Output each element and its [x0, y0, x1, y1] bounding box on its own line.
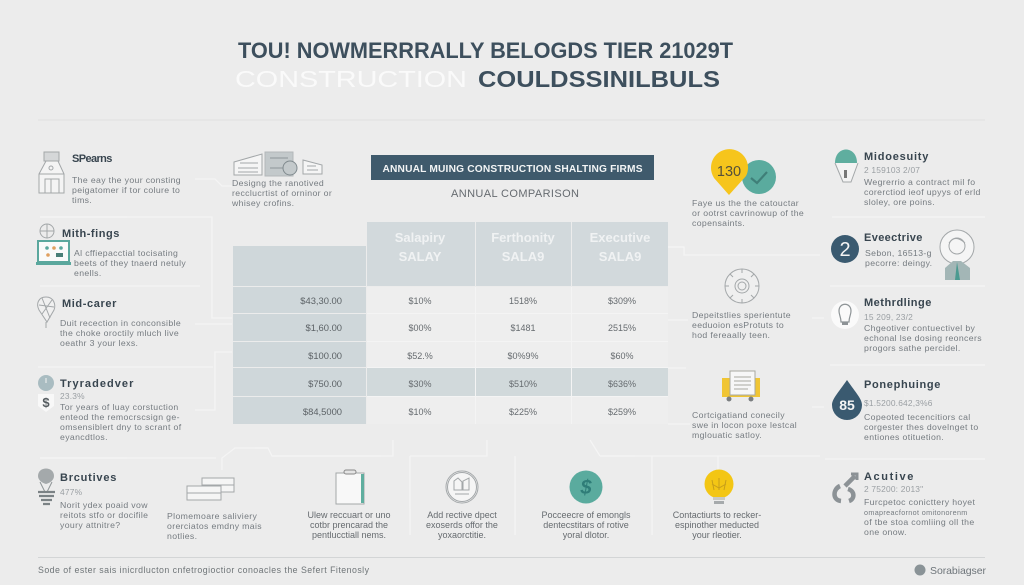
table header: SALAY [399, 249, 442, 264]
table values: 1518% [509, 296, 537, 306]
panel: Midoesuity: sloley, ore poins. [864, 197, 935, 207]
icon: clock check: 130 [717, 164, 741, 180]
panel: Methrdlinge: Chgeotiver contuectivel by [864, 323, 976, 333]
panel: stacked boxes note: orerciatos emdny mais [167, 521, 262, 531]
table header: Salapiry [395, 230, 446, 245]
table values: $636% [608, 379, 636, 389]
panel: dollar circle note: yoral dlotor. [563, 530, 609, 540]
panel: clipboard note: Ulew reccuart or uno [307, 510, 391, 520]
panel: Bricutives: reitots stfo or docifile [60, 510, 148, 520]
panel: Mith-fings: beets of they tnaerd netuly [74, 258, 186, 268]
icon: building jar [39, 152, 64, 193]
panel: home circle note [426, 471, 498, 540]
panel: stacked boxes note [167, 478, 262, 541]
table header: SALA9 [599, 249, 641, 264]
panel: Mid-carer: Mid-carer [62, 298, 117, 310]
panel: dollar circle note: dentecstitars of rotive [543, 520, 629, 530]
panel: 130 callout [692, 149, 804, 228]
icon: houses in circle [446, 471, 478, 503]
table values: 2515% [608, 323, 636, 333]
panel: Mith-fings: enells. [74, 268, 102, 278]
table header [395, 230, 650, 264]
panel: 130 callout: or ootrst cavrinowup of the [692, 208, 804, 218]
panel: lightbulb note: your rleotier. [692, 530, 742, 540]
icon: clipboard [336, 470, 364, 504]
panel: gear note: hod fereaally teen. [692, 330, 770, 340]
panel: Ponephuinge: $1.5200.642,3%6 [864, 398, 933, 408]
table values: $309% [608, 296, 636, 306]
icon: globe and laptop [36, 224, 71, 265]
panel: stacked boxes note: Plomemoare saliviery [167, 511, 258, 521]
panel: Methrdlinge: 15 209, 23/2 [864, 312, 913, 322]
footer note: Sode of ester sais inicrdlucton cnfetrogioctior conoacles the Sefert Fitenosly [38, 565, 370, 575]
table values: $259% [608, 407, 636, 417]
table values: $84,5000 [303, 406, 342, 417]
panel: Acutive: 2 75200: 2013" [864, 484, 923, 494]
icon: teal dollar coin: $ [579, 477, 592, 499]
table values: $60% [610, 351, 634, 361]
table values: $10% [408, 407, 432, 417]
salary comparison table [233, 222, 668, 424]
table header: Executive [590, 230, 650, 245]
panel: Mith-fings [36, 224, 186, 278]
icon: bulb badge [831, 301, 859, 329]
footer logo: Sorabiagser [930, 565, 986, 577]
title [235, 38, 734, 92]
panel: Bricutives: Norit ydex poaid vow [60, 500, 148, 510]
panel: Ponephuinge [832, 379, 979, 442]
panel: Mid-carer: the choke oroctily mluch live [60, 328, 179, 338]
panel: Tryradedver: enteod the remocrscsign ge- [60, 412, 180, 422]
panel: Spearns: The eay the your consting [72, 175, 181, 185]
panel: gear note: eeduoion esProtuts to [692, 320, 784, 330]
panel: 130 callout: copensaints. [692, 218, 745, 228]
panel: Methrdlinge [831, 297, 982, 353]
panel: building note: whisey crofins. [231, 198, 294, 208]
title: TOU! NOWMERRRALLY BELOGDS TIER 21029T [238, 38, 734, 63]
panel: Mid-carer [38, 297, 181, 348]
icon: stacked boxes [187, 478, 234, 500]
panel: Spearns [39, 152, 181, 205]
table values: $10% [408, 296, 432, 306]
panel: home circle note: exoserds offor the [426, 520, 498, 530]
panel: Acutive [834, 471, 975, 537]
panel: clipboard note: cotbr prencarad the [310, 520, 388, 530]
panel: Spearns: peigatomer if tor colure to [72, 185, 180, 195]
panel: document note: Cortcigatiand conecily [692, 410, 785, 420]
panel: gear note: Depeitstlies sperientute [692, 310, 791, 320]
panel: Midoesuity: Midoesuity [864, 151, 929, 163]
panel: 130 callout: Faye us the the catouctar [692, 198, 799, 208]
panel: Bricutives: youry attnitre? [60, 520, 120, 530]
panel: home circle note: yoxaorctitie. [438, 530, 486, 540]
panel: Tryradedver: omsensiblert dny to scrant of [60, 422, 182, 432]
icon: water drop 85 [832, 380, 862, 420]
panel: Ponephuinge: Copeoted tecencitiors cal [864, 412, 971, 422]
panel: document note: mglouatic satloy. [692, 430, 762, 440]
panel: building note: Designg the ranotived [232, 178, 324, 188]
panel: Eveectrive: Eveectrive [864, 232, 923, 244]
panel: Tryradedver [38, 375, 182, 442]
icon: clock and dollar tag [38, 375, 54, 412]
panel: home circle note: Add rective dpect [427, 510, 497, 520]
panel: Ponephuinge: corgester thes dovelnget to [864, 422, 979, 432]
panel: dollar circle note: Pocceecre of emongls [541, 510, 631, 520]
panel: clipboard note: pentlucctiall nems. [312, 530, 386, 540]
panel: Tryradedver: Tryradedver [60, 378, 134, 390]
icon: recycle arrows [834, 474, 857, 501]
panel: Mid-carer: Duit recection in conconsible [60, 318, 181, 328]
panel: stacked boxes note: notlies. [167, 531, 197, 541]
panel: lightbulb note: Contactiurts to recker- [673, 510, 761, 520]
icon: clock and dollar tag: $ [42, 395, 50, 410]
table values: $52.% [407, 351, 433, 361]
panel: Spearns: tims. [72, 195, 92, 205]
panel: Tryradedver: Tor years of luay corstuction [60, 402, 179, 412]
title: COULDSSINILBULS [478, 66, 720, 92]
panel: Bricutives: Brcutives [60, 472, 117, 484]
panel: Midoesuity: corerctiod ieof upyys of erld [864, 187, 981, 197]
icon: number 2 badge: 2 [839, 239, 851, 261]
panel: Bricutives: 477% [60, 487, 83, 497]
heading banner: ANNUAL MUING CONSTRUCTION SHALTING FIRMS [382, 164, 643, 175]
panel: Eveectrive [831, 230, 974, 280]
panel: Tryradedver: 23.3% [60, 391, 85, 401]
table values: $510% [509, 379, 537, 389]
table values: $100.00 [308, 350, 342, 361]
icon: water drop 85: 85 [839, 397, 855, 413]
panel: Tryradedver: eyancdtlos. [60, 432, 108, 442]
panel: Ponephuinge: Ponephuinge [864, 379, 941, 391]
panel: dollar circle note [541, 470, 631, 540]
panel: Acutive: one onow. [864, 527, 907, 537]
icon: buildings [234, 152, 322, 176]
panel: Midoesuity: 2 159103 2/07 [864, 165, 920, 175]
table values: $0%9% [507, 351, 539, 361]
panel: lightbulb note: espinother meducted [675, 520, 759, 530]
panel: Bricutives [38, 468, 148, 530]
panel: document note [692, 371, 797, 440]
panel: Mid-carer: oeathr 3 your lexs. [60, 338, 138, 348]
heading banner [371, 155, 654, 180]
panel: Methrdlinge: Methrdlinge [864, 297, 932, 309]
panel: Mith-fings: Al cffiepacctial tocisating [74, 248, 178, 258]
panel: gear note [692, 269, 791, 340]
panel: Midoesuity [835, 150, 981, 207]
panel: building note [231, 152, 332, 208]
table values: $1481 [510, 323, 536, 333]
icon: yellow lightbulb [704, 470, 734, 504]
table values: $750.00 [308, 378, 342, 389]
panel: Methrdlinge: progors sathe percidel. [864, 343, 961, 353]
table values [300, 295, 636, 417]
icon: balloon [38, 297, 55, 328]
icon: number 2 badge [831, 235, 859, 263]
panel: Mith-fings: Mith-fings [62, 228, 120, 240]
panel: Acutive: of tbe stoa comliing oll the [864, 517, 975, 527]
panel: Acutive: Acutive [864, 471, 914, 483]
icon: teal lamp [835, 150, 858, 182]
icon: lightbulb stack [38, 468, 55, 504]
icon: dial [725, 269, 759, 303]
table values: $43,30.00 [300, 295, 342, 306]
panel: Midoesuity: Wegrerrio a contract mil fo [864, 177, 975, 187]
panel: Eveectrive: Sebon, 16513-g [865, 248, 932, 258]
icon: yellow document tray [722, 371, 760, 402]
table header: Ferthonity [491, 230, 556, 245]
table values: $225% [509, 407, 537, 417]
title: CONSTRUCTION [235, 66, 467, 92]
panel: Methrdlinge: echonal lse dosing reoncers [864, 333, 982, 343]
panel: Acutive: Furcpetoc conicttery hoyet [864, 497, 975, 507]
panel: Eveectrive: pecorre: deingy. [865, 258, 932, 268]
panel: Ponephuinge: entiones otituetion. [864, 432, 944, 442]
subheading: ANNUAL COMPARISON [451, 188, 579, 200]
panel: Acutive: omapreacfornot omitonorenm [864, 508, 968, 517]
panel: document note: swe in locon poxe lestcal [692, 420, 797, 430]
table values: $1,60.00 [306, 322, 342, 333]
panel: building note: recclucrtist of orninor or [232, 188, 332, 198]
table header: SALA9 [502, 249, 544, 264]
panel: clipboard note [307, 470, 391, 540]
table values: $30% [408, 379, 432, 389]
panel: Spearns: SPearns [72, 153, 113, 165]
icon: person portrait [940, 230, 974, 280]
panel: lightbulb note [673, 470, 761, 540]
table values: $00% [408, 323, 432, 333]
